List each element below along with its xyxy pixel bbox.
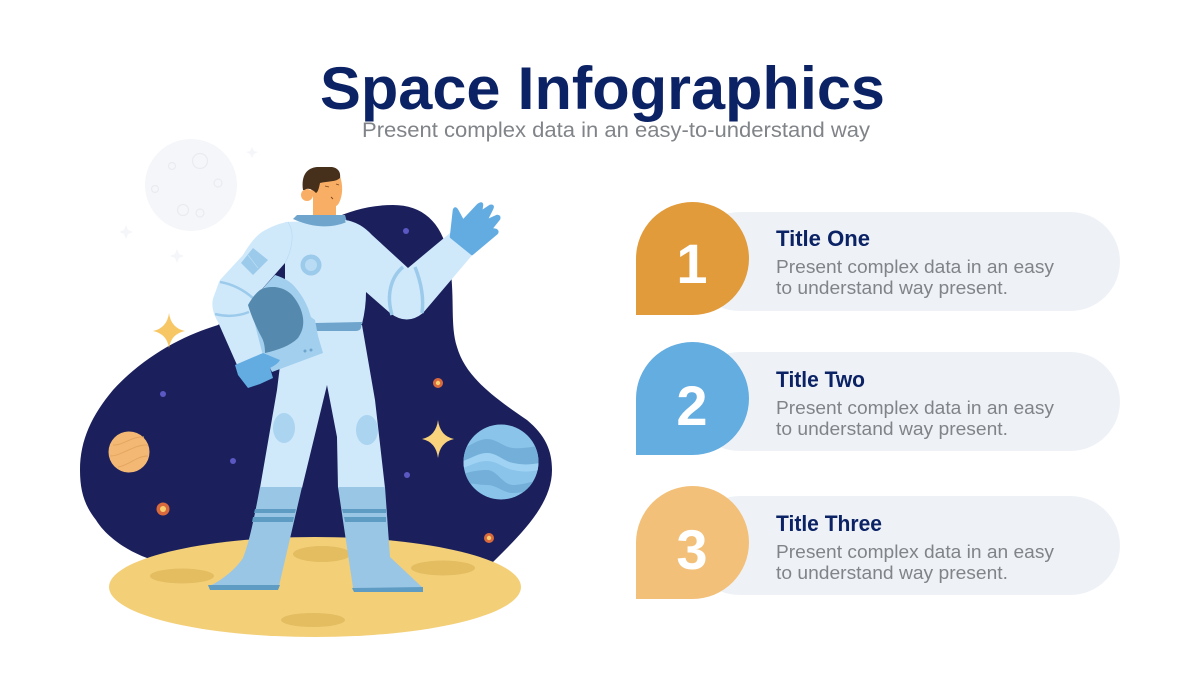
gold star left bbox=[153, 313, 185, 348]
left boot bbox=[208, 487, 302, 590]
collar bbox=[293, 215, 347, 226]
item 1 bbox=[636, 202, 1120, 315]
raised arm bbox=[345, 220, 474, 320]
neck and head bbox=[301, 167, 342, 218]
item text: Present complex data in an easy bbox=[776, 398, 1054, 418]
astronaut bbox=[208, 167, 499, 592]
knee patches bbox=[273, 413, 378, 445]
dark space blob bbox=[80, 205, 552, 562]
number badge bbox=[636, 342, 749, 455]
legs bbox=[260, 325, 385, 488]
number badge bbox=[636, 486, 749, 599]
item title: Title Three bbox=[776, 511, 882, 536]
belt bbox=[315, 322, 362, 331]
number: 2 bbox=[676, 374, 708, 437]
number badge bbox=[636, 202, 749, 315]
small purple dots bbox=[160, 228, 410, 478]
item text: Present complex data in an easy bbox=[776, 257, 1054, 277]
faint background stars bbox=[119, 147, 258, 263]
card background bbox=[690, 496, 1120, 595]
gold star right bbox=[422, 420, 454, 458]
item title: Title Two bbox=[776, 367, 865, 392]
title: Space Infographics bbox=[320, 55, 885, 122]
number: 1 bbox=[676, 232, 708, 295]
orange planet bbox=[108, 432, 150, 472]
left arm bbox=[212, 222, 292, 365]
torso bbox=[285, 220, 366, 324]
chest badge bbox=[300, 254, 322, 276]
item title: Title One bbox=[776, 226, 870, 251]
item text: Present complex data in an easy bbox=[776, 542, 1054, 562]
number: 3 bbox=[676, 518, 708, 581]
helmet bbox=[248, 275, 323, 372]
card background bbox=[690, 352, 1120, 451]
item text: to understand way present. bbox=[776, 278, 1008, 298]
moon ground bbox=[109, 537, 521, 637]
blue striped planet bbox=[463, 424, 540, 500]
arm patch bbox=[241, 248, 268, 275]
card background bbox=[690, 212, 1120, 311]
small orange dots bbox=[156, 378, 494, 543]
right boot bbox=[338, 487, 423, 592]
raised glove bbox=[451, 204, 499, 254]
illustration: astronaut on the moon bbox=[80, 139, 552, 637]
subtitle: Present complex data in an easy-to-understand way bbox=[362, 119, 871, 142]
item text: to understand way present. bbox=[776, 563, 1008, 583]
item 2 bbox=[636, 342, 1120, 455]
moon with craters bbox=[145, 139, 237, 231]
item text: to understand way present. bbox=[776, 419, 1008, 439]
item 3 bbox=[636, 486, 1120, 599]
holding glove bbox=[235, 353, 280, 388]
